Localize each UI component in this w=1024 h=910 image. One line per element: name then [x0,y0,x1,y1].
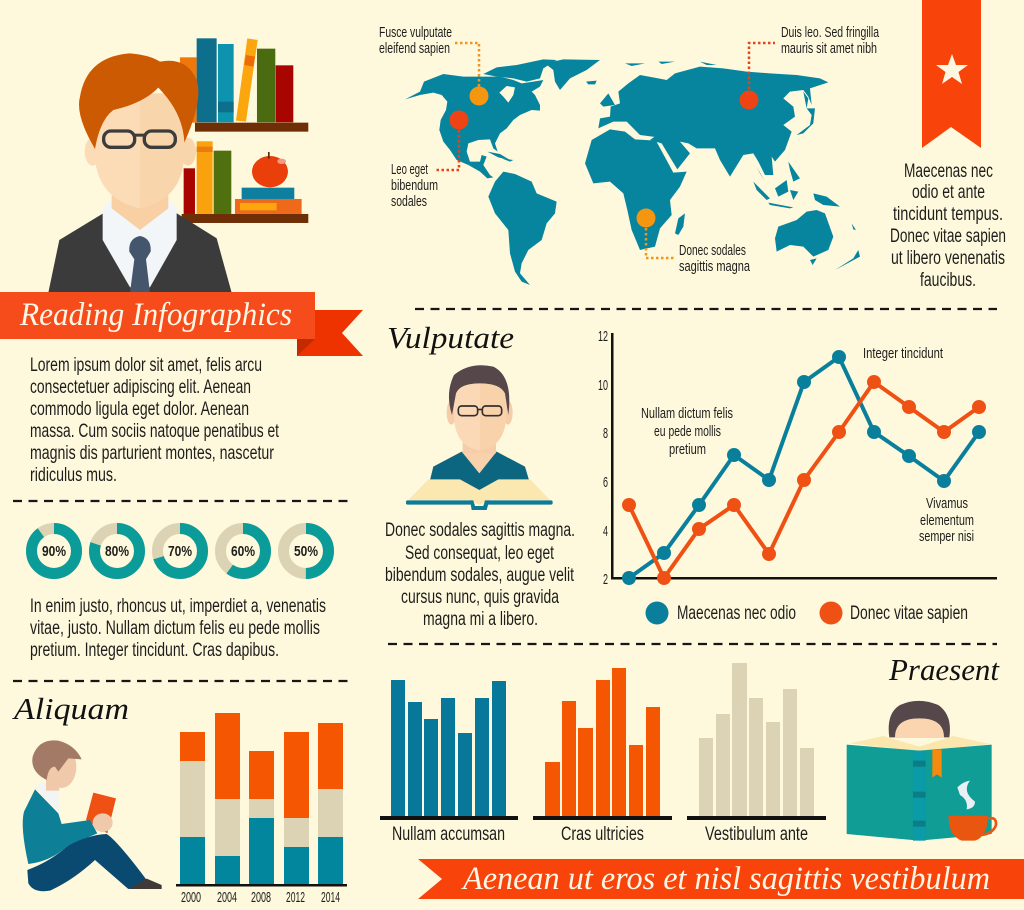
icon: man with open book [406,365,553,510]
line chart: Nullam dictum felis [641,405,733,422]
map markers and callouts: sagittis magna [679,258,750,275]
stacked bar chart [176,713,347,906]
donut charts: 50% [294,543,318,560]
line chart legend: Maecenas nec odio [677,603,796,624]
stacked bar chart: 2000 [181,889,201,906]
title ribbon: Reading Infographics [19,297,292,333]
heading: Aliquam: Aliquam [12,691,129,726]
donut charts: 70% [168,543,192,560]
bar chart: Nullam accumsan [380,680,518,845]
map markers and callouts [379,24,879,275]
intro paragraph: massa. Cum sociis natoque penatibus et [30,421,280,442]
intro paragraph: magnis dis parturient montes, nascetur [30,443,274,464]
bar chart: Vestibulum ante: Vestibulum ante [705,824,808,845]
right paragraph: odio et ante [912,182,985,203]
right paragraph: faucibus. [920,270,976,291]
donut caption: vitae, justo. Nullam dictum felis eu pede mollis [30,618,320,639]
bookmark with star [922,0,981,148]
bar chart: Cras ultricies [533,668,672,845]
intro paragraph: consectetuer adipiscing elit. Aenean [30,377,251,398]
title ribbon [0,292,363,356]
middle paragraph: Donec sodales sagittis magna. [385,520,575,541]
stacked bar chart: 2004 [217,889,237,906]
bar chart: Cras ultricies: Cras ultricies [561,824,644,845]
line chart: elementum [920,512,974,529]
donut charts: 60% [231,543,255,560]
map markers and callouts: mauris sit amet nibh [781,40,877,57]
middle paragraph: bibendum sodales, augue velit [385,565,575,586]
middle paragraph: cursus nunc, quis gravida [401,587,559,608]
line chart: semper nisi [919,528,974,545]
map markers and callouts: eleifend sapien [379,40,450,57]
icon: person behind book with cup [847,701,996,841]
donut charts: 90% [42,543,66,560]
donut charts [32,528,328,574]
intro paragraph: ridiculus mus. [30,465,117,486]
line chart legend [646,602,968,624]
line chart legend: Donec vitae sapien [850,603,968,624]
right paragraph: Maecenas nec [904,161,993,182]
line chart [598,328,997,588]
line chart: Integer tincidunt [863,345,944,362]
line chart: pretium [669,441,706,458]
map markers and callouts: Leo eget [391,161,429,178]
stacked bar chart: 2014 [321,889,340,906]
line chart: Vivamus [926,495,968,512]
intro paragraph: commodo ligula eget dolor. Aenean [30,399,249,420]
heading: Praesent: Praesent [888,652,1000,687]
bottom ribbon: Aenean ut eros et nisl sagittis vestibulum [461,861,990,897]
line chart: 10 [598,377,608,394]
right paragraph [890,161,1006,291]
hero character [48,53,232,293]
middle paragraph [385,520,575,630]
bookshelf illustration [180,38,308,223]
map markers and callouts: Donec sodales [679,242,746,259]
map markers and callouts: Fusce vulputate [379,24,452,41]
line chart: 6 [603,474,608,491]
line chart: 2 [603,571,608,588]
icon: seated reader [23,740,162,891]
donut caption: pretium. Integer tincidunt. Cras dapibus. [30,640,279,661]
heading: Vulputate: Vulputate [387,320,514,355]
donut charts: 80% [105,543,129,560]
line chart: eu pede mollis [654,423,721,440]
stacked bar chart: 2012 [286,889,305,906]
bar chart: Vestibulum ante [687,663,826,845]
map markers and callouts: Duis leo. Sed fringilla [781,24,879,41]
map markers and callouts: bibendum [391,177,438,194]
middle paragraph: Sed consequat, leo eget [405,543,555,564]
stacked bar chart: 2008 [251,889,271,906]
line chart: 12 [598,328,608,345]
world map [405,59,860,285]
bar chart: Nullam accumsan: Nullam accumsan [392,824,505,845]
line chart: 4 [603,523,608,540]
donut caption: In enim justo, rhoncus ut, imperdiet a, venenatis [30,596,326,617]
intro paragraph: Lorem ipsum dolor sit amet, felis arcu [30,355,262,376]
middle paragraph: magna mi a libero. [423,609,538,630]
donut caption [30,596,326,661]
intro paragraph [30,355,280,486]
line chart: 8 [603,425,608,442]
map markers and callouts: sodales [391,193,427,210]
